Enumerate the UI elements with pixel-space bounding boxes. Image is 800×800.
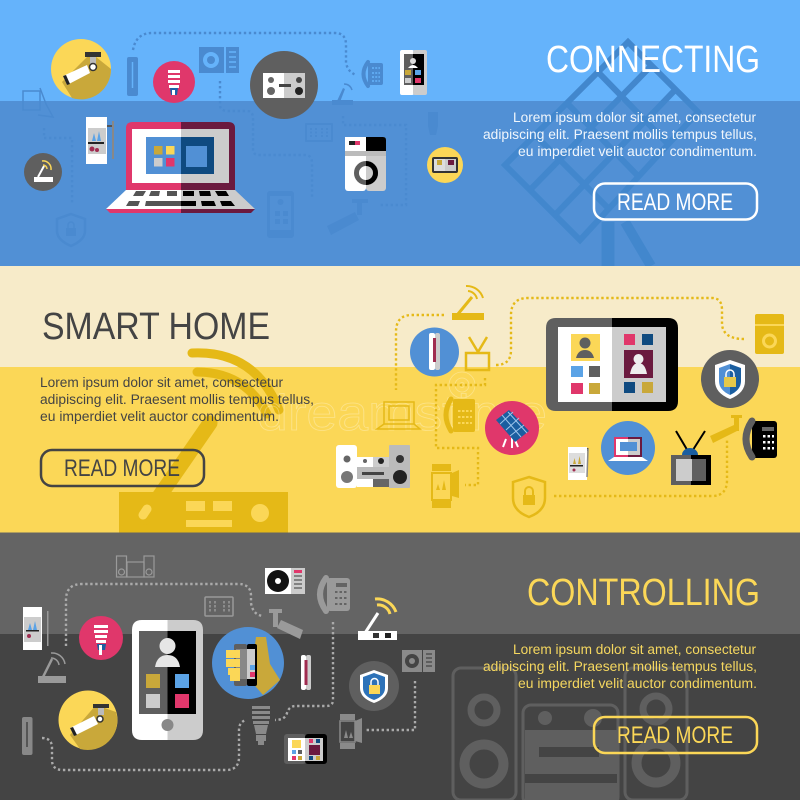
icon: thermometer grey [22,717,32,755]
icon: laptop badge [601,421,655,475]
background icon: stereo [453,668,687,800]
button: READ MORE [64,455,180,482]
background icon: solar panel [505,42,698,266]
background icon: router [119,353,288,533]
text block: eu imperdiet velit auctor condimentum. [518,144,757,159]
text block: adipiscing elit. Praesent mollis tempus tellus, [40,392,314,407]
text block: Lorem ipsum dolor sit amet, consectetur [513,642,757,657]
icon: hand holding phone badge [212,627,284,699]
heading: CONTROLLING [527,572,760,614]
icon: router grey [38,653,66,683]
watermark: dreamstime [257,385,547,441]
icon: shield faded [513,477,545,517]
icon: shield badge [701,350,759,408]
icon: tablet [546,318,678,411]
icon: thermometer [301,655,311,690]
icon: thermometer badge [410,328,459,376]
icon: bulb faded [428,112,438,135]
button [594,184,757,220]
icon: smartphone [400,50,427,95]
icon: router [358,599,397,640]
icon: shield badge [349,661,399,711]
icon: phone faded [446,399,475,432]
text block: Lorem ipsum dolor sit amet, consectetur [513,110,757,125]
icon: router faded [332,84,353,105]
icon: bulb badge [79,616,123,660]
icon: washer faded [755,314,784,354]
icon: router badge [24,153,62,191]
panel: smart home [0,266,800,533]
text block: adipiscing elit. Praesent mollis tempus tellus, [483,127,757,142]
icon: TV faded [466,337,489,370]
panel: controlling [0,532,800,800]
connector lines [42,584,415,770]
icon: bulb grey [252,706,270,745]
icon: desk phone [746,421,777,458]
icon: keypad faded [306,124,332,141]
heading: CONNECTING [546,39,760,81]
icon: keypad outline [205,597,233,616]
icon: camera grey [269,609,303,639]
icon: fridge small [568,447,588,480]
icon: stereo outline [116,556,154,577]
icon: smartphone faded [267,191,294,238]
icon: laptop faded [377,402,420,429]
text block: adipiscing elit. Praesent mollis tempus tellus, [483,659,757,674]
button [41,450,204,486]
text block [483,110,757,159]
text block [483,642,757,691]
panel: connecting [0,0,800,266]
text block: eu imperdiet velit auctor condimentum. [518,676,757,691]
text block: eu imperdiet velit auctor condimentum. [40,409,279,424]
text block: Lorem ipsum dolor sit amet, consectetur [40,375,284,390]
icon: washing machine [345,137,386,191]
icon: light bulb [153,61,195,103]
icon: tablet badge [427,147,463,183]
icon: security camera [51,39,111,99]
icon: small tablet [284,734,327,764]
icon: fridge [86,117,114,164]
button: READ MORE [617,189,733,216]
icon: fridge faded [432,464,459,508]
icon: phone grey [320,578,350,611]
icon: laptop [106,122,255,213]
icon: hand with phone faded [23,88,53,117]
button: READ MORE [617,722,733,749]
heading: SMART HOME [42,306,270,348]
button [594,717,757,753]
icon: shield faded [57,214,85,246]
icon: fridge grey [340,714,362,749]
text block [40,375,314,424]
icon: smartphone large [132,620,203,740]
icon: stereo [336,445,410,488]
icon: stereo [250,51,318,119]
icon: fridge [23,607,48,650]
icon: thermometer faded [127,57,138,96]
connector lines [396,298,744,496]
connector lines [44,33,406,205]
icon: television [671,431,711,485]
icon: camera faded [710,415,742,443]
icon: solar panel badge [485,401,539,455]
icon: fan grey [402,650,435,672]
icon: camera [58,690,118,750]
icon: fan [265,568,305,594]
icon: camera faded [327,199,368,235]
icon: fan faded [199,47,239,73]
icon: phone handset faded [364,62,383,86]
icon: router faded [452,286,484,320]
